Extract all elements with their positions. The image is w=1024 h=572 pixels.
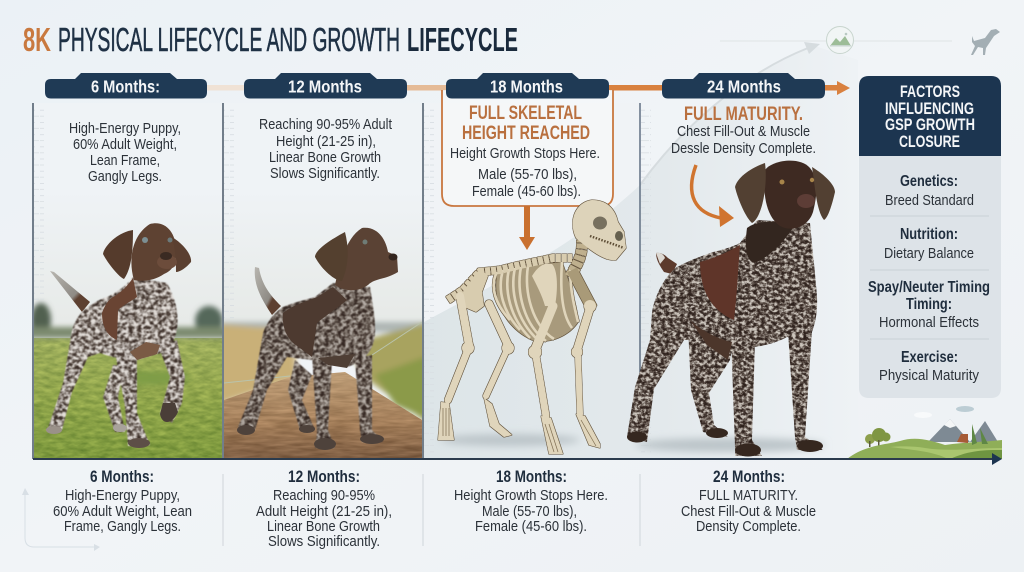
text: 18 months bottom: Male (55-70 lbs), <box>482 503 577 520</box>
text: 6 months bottom: Frame, Gangly Legs. <box>64 518 181 535</box>
text: 12 months bottom: Slows Significantly. <box>268 533 380 550</box>
text: 24 months top: Dessle Density Complete. <box>671 140 816 157</box>
text: 12 months bottom: Adult Height (21-25 in), <box>256 503 392 520</box>
panel: growth factors: Physical Maturity <box>879 367 979 384</box>
panel: growth factors: Genetics: <box>900 173 958 190</box>
top right decorative icons <box>720 26 1000 55</box>
callout: full skeletal height: HEIGHT REACHED <box>462 123 590 144</box>
panel: 6 months photo <box>34 260 222 458</box>
icon: landscape <box>847 406 1002 459</box>
callout: full skeletal height <box>442 90 613 206</box>
text: 12 months top: Linear Bone Growth <box>269 149 381 166</box>
arrow: callout to skeleton <box>519 206 535 250</box>
dog: 12 month puppy <box>237 228 398 450</box>
text: 18 months bottom: 18 Months: <box>496 468 567 486</box>
pill: 6 months: 6 Months: <box>91 76 160 96</box>
panel: growth factors: Dietary Balance <box>884 245 974 262</box>
arrow: bottom left axes <box>22 488 100 551</box>
pill: 18 months <box>446 73 609 98</box>
text: 12 months bottom <box>256 468 392 550</box>
panel: growth factors: Breed Standard <box>885 192 974 209</box>
text: 24 months bottom: Chest Fill-Out & Muscle <box>681 503 816 520</box>
panel: growth factors: GSP GROWTH <box>885 115 975 134</box>
text: 6 months top: 60% Adult Weight, <box>73 136 177 153</box>
text: 12 months bottom: 12 Months: <box>288 468 360 486</box>
text: 6 months bottom: 60% Adult Weight, Lean <box>53 503 192 520</box>
text: 18 months bottom: Height Growth Stops Here. <box>454 487 608 504</box>
arrow: curved to adult dog <box>692 165 734 227</box>
text: 24 months bottom: Density Complete. <box>696 518 801 535</box>
pill: 6 months <box>45 73 207 98</box>
dog: 24 month adult <box>627 161 835 457</box>
panel: growth factors: CLOSURE <box>899 132 960 151</box>
panel: growth factors: Spay/Neuter Timing <box>868 279 990 296</box>
text: 6 months bottom <box>53 468 192 535</box>
pill: 24 months: 24 Months <box>707 76 781 96</box>
panel: growth factors: Exercise: <box>901 349 958 366</box>
pill: 18 months: 18 Months <box>490 76 563 96</box>
panel: growth factors: Hormonal Effects <box>879 314 979 331</box>
timeline connector <box>207 81 850 95</box>
callout: full skeletal height: Height Growth Stops Here. <box>450 145 600 162</box>
ruler ticks <box>34 106 651 456</box>
growth curve background area <box>424 46 858 459</box>
panel: growth factors: FACTORS <box>900 82 960 101</box>
text: 12 months top: Slows Significantly. <box>270 165 380 182</box>
pill: 12 months: 12 Months <box>288 76 362 96</box>
text: 6 months top: Lean Frame, <box>90 152 160 169</box>
pill: 12 months <box>244 73 407 98</box>
text: 12 months top: Reaching 90-95% Adult <box>259 116 393 133</box>
text: 18 months bottom <box>454 468 608 535</box>
text: 24 months bottom <box>681 468 816 535</box>
panel: 12 months photo <box>224 253 422 458</box>
ground shadows <box>440 434 825 452</box>
timeline axis <box>33 453 1002 465</box>
dog: 6 month puppy <box>46 223 191 448</box>
text: 6 months bottom: 6 Months: <box>90 468 154 486</box>
text: 24 months top: Chest Fill-Out & Muscle <box>677 123 810 140</box>
text: 12 months bottom: Reaching 90-95% <box>273 487 375 504</box>
panel: 18 months background <box>424 103 640 322</box>
text: 12 months top: Height (21-25 in), <box>276 133 376 150</box>
text: 24 months bottom: 24 Months: <box>713 468 785 486</box>
panel: growth factors <box>859 76 1001 398</box>
panel: growth factors: INFLUENCING <box>885 99 974 118</box>
text: 6 months bottom: High-Energy Puppy, <box>65 487 180 504</box>
text: 18 months bottom: Female (45-60 lbs). <box>475 518 587 535</box>
text: 12 months bottom: Linear Bone Growth <box>267 518 380 535</box>
text: 6 months top: High-Energy Puppy, <box>69 120 181 137</box>
panel: growth factors: Timing: <box>906 296 952 313</box>
text: 12 months top <box>259 116 393 182</box>
text: 6 months top: Gangly Legs. <box>88 168 162 185</box>
callout: full skeletal height: FULL SKELETAL <box>469 103 582 124</box>
ruler lines <box>33 103 640 459</box>
title: LIFECYCLE <box>407 21 518 58</box>
text: 24 months bottom: FULL MATURITY. <box>699 487 798 504</box>
text: 6 months top <box>69 120 181 185</box>
panel: skeleton at 18 months <box>438 200 626 454</box>
text: 24 months top: FULL MATURITY. <box>684 104 803 125</box>
growth curve arrow <box>640 42 820 185</box>
callout: full skeletal height: Male (55-70 lbs), <box>478 166 577 183</box>
pill: 24 months <box>662 73 825 98</box>
callout: full skeletal height: Female (45-60 lbs). <box>472 183 581 200</box>
text: 24 months top <box>671 104 816 157</box>
panel: growth factors: Nutrition: <box>900 226 958 243</box>
title: PHYSICAL LIFECYCLE AND GROWTH <box>58 21 400 58</box>
title: 8K <box>23 21 51 58</box>
